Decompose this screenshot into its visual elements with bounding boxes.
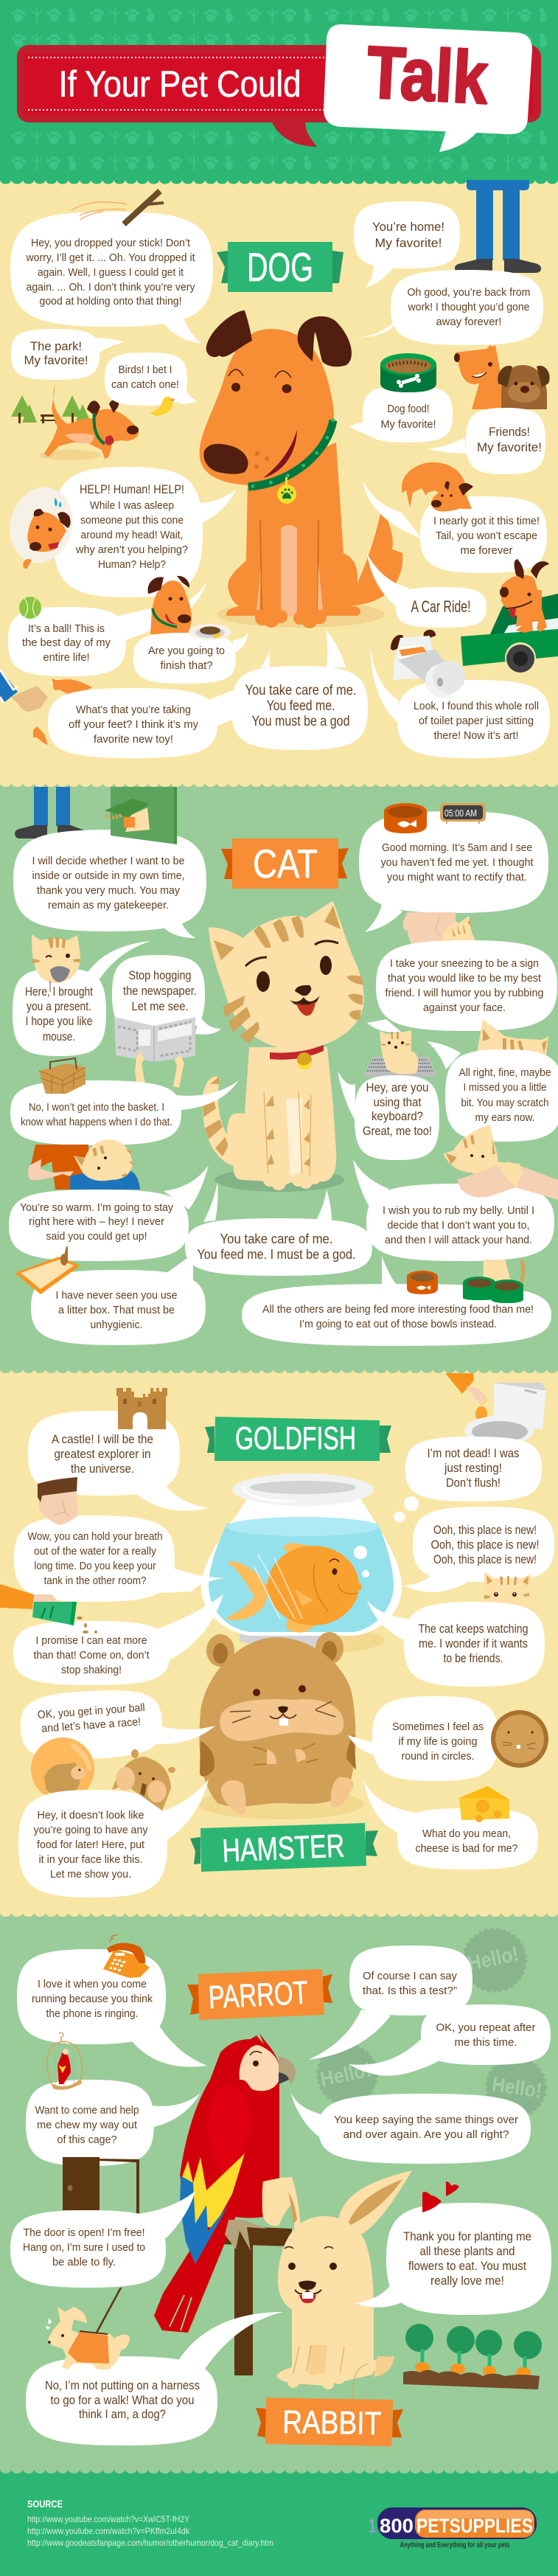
bubble: planting: Thank you for planting me [403,2229,531,2243]
bubble: sneezing: I take your sneezing to be a sign [390,957,539,970]
bubble: promise eat more: I promise I can eat more [35,1634,147,1647]
bubble: you take care of me (cat) [185,1182,372,1276]
bubble: castle: the universe. [71,1462,134,1476]
bubble: warm: You’re so warm. I’m going to stay [20,1201,173,1214]
icon: open door [63,2157,139,2213]
icon: cat watching [484,1572,531,1609]
goldfish [226,1544,361,1633]
bubble: friends: My favorite! [477,440,542,454]
icon: newspaper [114,1017,195,1088]
hamster: main illustration [198,1632,364,1819]
icon: hamster with full cheeks [112,1749,175,1811]
icon: three food bowls with cat [407,1260,526,1303]
bubble: phone ringing: the phone is ringing. [46,2007,139,2020]
bubble: you take care of me (dog): You must be a god [252,714,349,729]
bubble: never seen litter box [15,1246,206,1345]
bubble: door open [10,2191,195,2288]
bubble: of course: that. Is this a test?” [363,1985,457,1997]
bubble: gatekeeper: thank you very much. You may [37,884,180,897]
cat ribbon heading: CAT [253,841,318,886]
bubble: planting [355,2181,551,2315]
icon: cat biting hand [443,1125,558,1200]
bubble: harness: to go for a walk! What do you [50,2393,195,2407]
bubble: you repeat [349,2004,551,2076]
bubble: basket: No, I won’t get into the basket. I [29,1101,164,1114]
bubble: hold your breath: Wow, you can hold your breath [28,1530,162,1543]
bubble: cage [26,2032,200,2166]
bubble: it's a ball: It’s a ball! This is [28,622,105,635]
bubble: birds [105,353,197,416]
bubble: food for later [18,1780,209,1898]
bubble: toilet paper art: of toilet paper just sitting [419,715,534,727]
bubble: promise eat more: than that! Come on, don’t [34,1649,150,1662]
bubble: this place is new: Ooh, this place is new! [430,1538,540,1552]
icon: basket [39,1058,86,1094]
logo: 1800 Pet Supplies: Anything and Everything for all your pets [400,2541,510,2549]
bubble: you repeat: me this time. [454,2036,517,2049]
bubble: cone help: someone put this cone [80,514,184,527]
bubble: dog food: Dog food! [388,403,429,415]
bubble: good morning: you haven’t fed me yet. I thought [380,856,534,869]
bubble: race: and let’s have a race! [41,1715,142,1735]
bubble: present mouse: mouse. [43,1030,75,1044]
bubble: keyboard: using that [373,1095,422,1109]
dog: main illustration [200,310,402,628]
bubble: rub my belly [353,1159,554,1261]
icon: dog in car [461,559,558,673]
bubble: it's a ball [8,597,151,676]
bubble: same things: You keep saying the same things over [334,2114,518,2126]
bubble: what's that on your feet: What’s that you’re taking [76,704,191,716]
bubble: cone help: around my head! Wait, [81,529,183,541]
title: If Your Pet Could: If Your Pet Could [59,63,301,105]
rabbit ribbon heading: RABBIT [282,2404,382,2442]
bubble: newspaper: Stop hogging [128,968,192,982]
icon: carrot patch [403,2324,542,2389]
bubble: cat keeps watching: The cat keeps watching [419,1622,528,1636]
bubble: back from work: work! I thought you’d gone [408,301,529,313]
bubble: nearly got it (tail chasing): I nearly got it this time! [433,515,540,527]
bubble: present mouse: I hope you like [25,1014,93,1028]
footer: sources [27,2498,273,2548]
hello starbursts (parrot): Hello! [466,1942,520,1975]
icon: stick [72,191,164,224]
bubble: keyboard: keyboard? [372,1109,423,1123]
bubble: warm: said you could get up! [46,1230,147,1243]
icon: cat flap door [105,787,177,844]
bubble: phone ringing: I love it when you come [38,1978,147,1990]
footer: sources: http://www.youtube.com/watch?v=PKffm2uI4dk [27,2526,190,2536]
icon: dog in cone [1,480,81,570]
bubble: present mouse: you a present. [27,999,91,1013]
bubble: cone help: Human? Help? [98,558,166,571]
bubble: dropped stick: Hey, you dropped your stick! Don’t [31,237,191,249]
bubble: rub my belly: and then I will attack your hand. [385,1234,532,1246]
bubble: same things: and over again. Are you all right? [343,2128,509,2141]
bubble: you take care of me (dog): You feed me. [267,698,335,714]
bubble: nearly got it (tail chasing) [363,462,547,573]
bubble: birds: Birds! I bet I [118,364,172,376]
bubble: sneezing: that you would like to be my best [388,972,542,985]
icon: cat peeking behind bubble [477,1019,548,1062]
bubble: cheese is bad [363,1780,538,1869]
icon: bird [150,397,175,416]
bubble: you repeat: OK, you repeat after [436,2021,535,2034]
bubble: not dead: Don’t flush! [446,1476,501,1490]
bubble: food for later: Let me show you. [50,1868,131,1881]
bubble: food for later: it in your face like this. [38,1853,143,1866]
perch [219,2226,292,2375]
bubble: sneezing: friend. I will humor you by rubbing [385,987,544,999]
bubble: going round in circles [348,1696,548,1781]
bubble: never seen litter box: unhygienic. [90,1319,143,1331]
bubble: what's that on your feet [48,688,233,758]
icon: cat on laptop keyboard [363,1030,436,1077]
bubble: food for later: food for later! Here, put [37,1839,145,1851]
icon: green dog bowl [380,353,436,392]
bubble: cheese is bad: cheese is bad for me? [416,1842,517,1855]
bubble: never seen litter box: a litter box. That must be [58,1304,175,1316]
bubble: keyboard: Great, me too! [363,1124,432,1138]
bubble: present mouse [13,934,151,1056]
bubble: dog food: My favorite! [380,418,436,431]
logo: 1800 Pet Supplies: 800 [380,2515,414,2537]
bubble: dog food [349,353,453,442]
icon: toilet and hand with goldfish [445,1373,546,1445]
goldfish ribbon heading: GOLDFISH [235,1420,356,1457]
bubble: you take care of me (dog): You take care of me. [245,683,357,698]
bubble: are you going to finish: Are you going to [148,645,225,657]
bubble: sneezing [367,940,557,1032]
icon: orange cat bowl [384,803,427,833]
icon: foot and bones arm [0,669,92,745]
bubble: what's that on your feet: favorite new toy! [94,733,173,746]
bubble: castle: A castle! I will be the [52,1432,153,1446]
bubble: sneezing: against your face. [423,1001,506,1014]
leash [97,2288,121,2333]
bubble: cat keeps watching: me. I wonder if it wants [419,1636,528,1650]
bubble: you take care of me (cat): You take care of me. [220,1232,333,1246]
icon: hamster in ball [31,1737,94,1801]
bubble: dropped stick: again. Well, I guess I could get it [38,266,184,279]
bubble: the park: My favorite! [24,353,88,367]
bubble: cone help [53,467,237,597]
rabbit ribbon heading [256,2398,403,2446]
bubble: promise eat more [0,1584,223,1685]
bubble: harness: No, I’m not putting on a harness [45,2378,200,2392]
bubble: not dead: just resting! [444,1461,502,1475]
bubble: are you going to finish: finish that? [161,659,212,672]
bubble: of course [308,1945,472,2060]
bubble: gatekeeper: I will decide whether I want to be [32,855,184,867]
icon: hamster in wheel [491,1710,548,1768]
title bubble: Talk [324,24,532,152]
bubble: newspaper [112,955,221,1088]
bubble: promise eat more: stop shaking! [61,1664,122,1676]
logo: 1800 Pet Supplies: PETSUPPLIES [416,2515,533,2537]
bubble: cone help: While I was asleep [90,499,174,512]
bubble: planting: really love me! [430,2274,504,2288]
icon: orange and brown dogs [454,345,550,409]
bubble: are you going to finish [133,624,248,684]
bubble: toilet paper art: there! Now it’s art! [433,729,519,742]
bubble: gatekeeper: inside or outside in my own time, [32,869,184,882]
bubble: you take care of me (cat): You feed me. I must be a god. [198,1247,355,1262]
bubble: same things [290,2092,531,2164]
bubble: hold your breath: out of the water for a really [34,1545,156,1558]
bubble: nearly got it (tail chasing): me forever [460,544,513,557]
bubble: cheese is bad: What do you mean, [422,1827,511,1840]
bubble: hold your breath: long time. Do you keep your [34,1560,156,1572]
bubble: all right fine: bit. You may scratch [461,1097,548,1109]
bubble: not dead: I’m not dead! I was [428,1446,519,1460]
bubble: it's a ball: entire life! [43,651,90,664]
bubble: cage: Want to come and help [35,2104,139,2117]
bubble: basket [10,1058,239,1145]
logo: 1800 Pet Supplies [369,2507,537,2549]
icon: curled dog [402,462,473,512]
bubble: the park [11,329,125,380]
dog ribbon heading: DOG [247,244,313,290]
title bubble: Talk: Talk [365,31,490,119]
bubble: food for later: Hey, it doesn’t look like [37,1809,144,1822]
cat: owner legs [15,787,89,839]
parrot ribbon heading [187,1969,332,2020]
bubble: food for later: you’re going to have any [34,1824,148,1836]
bubble: not dead [405,1437,542,1501]
bubble: you're home: You’re home! [372,220,444,234]
bubble: hold your breath: tank in the other room? [44,1575,146,1587]
bubble: gatekeeper [13,787,206,938]
hamster ribbon heading: HAMSTER [221,1827,345,1869]
bubble: dropped stick [10,191,213,344]
cat ribbon heading [221,839,349,889]
bubble: other bowls [242,1256,551,1346]
icon: hearts [422,2181,459,2212]
bubble: keyboard [338,1071,439,1160]
bubble: harness: think I am, a dog? [79,2407,166,2421]
bubble: going round in circles: Sometimes I feel as [392,1721,484,1733]
bubble: never seen litter box: I have never seen you use [56,1289,177,1302]
bubble: warm: right here with – hey! I never [29,1215,164,1228]
bubble: castle: greatest explorer in [55,1447,150,1461]
bubble: phone ringing: running because you think [32,1993,153,2005]
title banner [17,45,541,147]
bubble: warm [9,1165,209,1261]
bubble: present mouse: Here, I brought [25,985,93,999]
bubble: nearly got it (tail chasing): Tail, you won’t escape [436,530,537,542]
bubble: cat keeps watching [367,1600,545,1687]
cat: main illustration [203,901,364,1192]
bubble: cage: of this cage? [57,2134,116,2146]
thought bubbles [394,1496,419,1522]
icon: hand shaking fish food [0,1584,97,1634]
footer: sources: http://www.goodeatsfanpage.com/humor/otherhumor/dog_cat_diary.htm [27,2538,273,2548]
hello starbursts (parrot): Hello! [490,2073,543,2103]
icon: birdcage [47,2032,83,2090]
bubble: other bowls: All the others are being fed more interesting food than me! [262,1303,534,1316]
parrot ribbon heading: PARROT [208,1975,309,2016]
logo: 1800 Pet Supplies: 1 [369,2515,376,2537]
hello starbursts (parrot) [318,1929,545,2117]
bubble: cone help: why aren’t you helping? [75,544,188,556]
bubble: door open: Hang on, I’m sure I used to [23,2241,145,2254]
bubble: harness [26,2307,283,2445]
bubble: you're home: My favorite! [374,236,442,250]
bubble: other bowls: I’m going to eat out of those bowls instead. [299,1318,497,1330]
bubble: planting: flowers to eat. You must [408,2259,526,2273]
bubble: toilet paper art: Look, I found this whole roll [414,700,539,712]
bubble: cat keeps watching: to be friends. [444,1651,503,1665]
goldfish ribbon heading [205,1417,391,1461]
bubble: door open: be able to fly. [52,2256,116,2268]
icon: cheese [459,1786,509,1822]
icon: alarm clock 05:00 AM: 05:00 AM [444,808,477,819]
icon: castle [116,1388,167,1429]
bubble: all right fine: my ears now. [475,1111,535,1124]
icon: man's head [38,1477,78,1525]
bubble: this place is new [404,1507,554,1592]
footer: sources: SOURCE [27,2498,63,2510]
bubble: planting: all these plants and [420,2244,515,2258]
bubble: rub my belly: I wish you to rub my belly. Until I [383,1204,534,1217]
icon: orange telephone [103,1935,150,1978]
bubble: dropped stick: good at holding onto that thing! [40,295,181,308]
bubble: good morning: you might want to rectify that. [387,871,527,883]
bubble: this place is new: Ooh, this place is new! [433,1523,537,1537]
bubble: going round in circles: if my life is going [398,1735,478,1748]
bubble: door open: The door is open! I’m free! [24,2226,144,2239]
bubble: gatekeeper: remain as my gatekeeper. [48,899,169,912]
bubble: newspaper: the newspaper. [123,984,197,998]
icon: alarm clock 05:00 AM [440,803,486,824]
bubble: car ride: A Car Ride! [411,597,470,616]
icon: running dog in park [11,385,139,460]
bubble: dropped stick: worry, I’ll get it. ... Oh. You dropped it [26,251,195,264]
icon: dog in toilet paper [391,630,465,698]
bubble: newspaper: Let me see. [131,999,189,1013]
parrot: main illustration [154,2033,296,2333]
icon: plate with steak [189,624,231,640]
bubble: all right fine: I missed you a little [463,1081,547,1094]
bubble: this place is new: Ooh, this place is new! [433,1552,537,1566]
icon: tennis ball [19,597,41,619]
bubble: race [19,1687,215,1801]
rabbit: main illustration [262,2170,412,2404]
bubble: friends [428,408,545,474]
icon: rabbit in harness [46,2307,130,2370]
bubble: of course: Of course I can say [363,1970,457,1982]
bubble: castle [28,1388,208,1511]
goldfish: bowl with fish [201,1473,402,1653]
bubble: you're home [354,201,460,288]
bubble: back from work: Oh good, you’re back from [407,286,531,299]
hello starbursts (parrot): Hello! [318,2058,373,2091]
bubble: rub my belly: decide that I don’t want you to, [388,1219,529,1232]
bubble: it's a ball: the best day of my [22,636,111,649]
bubble: toilet paper art [370,630,550,758]
icon: litter box [15,1246,80,1294]
bubble: cage: me chew my way out [37,2119,138,2131]
bubble: all right fine [427,1041,558,1142]
icon: person hugging cat [28,1139,140,1190]
icon: peeking dog [148,576,207,634]
bubble: good morning [359,803,548,932]
dog ribbon heading [217,242,343,292]
icon: cat with mouse [32,934,80,992]
owner legs at top of dog panel [455,180,541,273]
bubble: car ride [367,554,486,628]
bubble: back from work [357,270,543,345]
bubble: keyboard: Hey, are you [366,1080,429,1094]
bubble: cone help: HELP! Human! HELP! [80,482,184,496]
bubble: good morning: Good morning. It’s 5am and I see [382,841,532,854]
footer: sources: http://www.youtube.com/watch?v=XwIC5T-fH2Y [27,2514,189,2524]
bubble: hold your breath [14,1477,224,1602]
bubble: basket: know what happens when I do that. [21,1116,172,1128]
bubble: race: OK, you get in your ball [37,1701,145,1721]
bubble: you take care of me (dog) [231,629,368,750]
bubble: birds: can catch one! [111,378,179,391]
icon: sneezing man face and cat [403,912,476,956]
bubble: back from work: away forever! [436,316,501,328]
bubble: phone ringing [17,1935,207,2067]
bubble: friends: Friends! [489,425,530,439]
bubble: what's that on your feet: off your feet? I think it’s my [69,718,198,731]
bubble: all right fine: All right, fine, maybe [458,1066,551,1079]
bubble: dropped stick: again. ... Oh. I don’t think you’re very [27,281,195,294]
bubble: the park: The park! [30,339,82,353]
bubble: going round in circles: round in circles. [401,1750,475,1763]
